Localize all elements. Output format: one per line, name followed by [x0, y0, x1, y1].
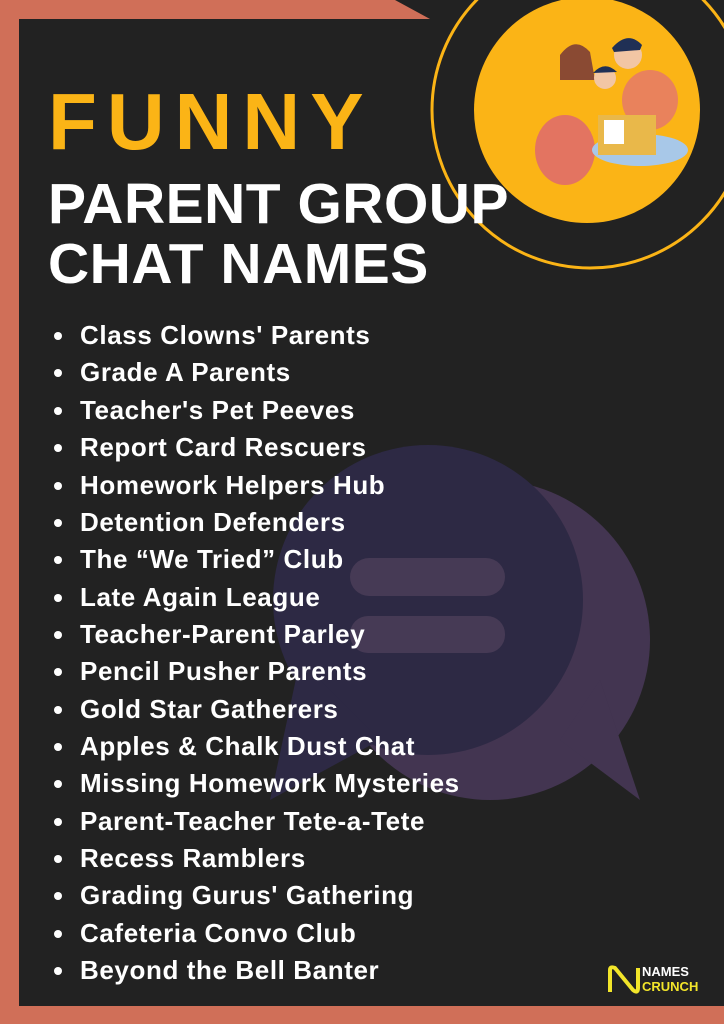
name list: Teacher-Parent Parley	[80, 619, 365, 649]
name list: Grade A Parents	[80, 357, 291, 387]
name list: Cafeteria Convo Club	[80, 918, 356, 948]
name list: Beyond the Bell Banter	[80, 955, 379, 985]
name list: Parent-Teacher Tete-a-Tete	[80, 806, 425, 836]
title	[48, 77, 509, 296]
name list: The “We Tried” Club	[80, 544, 344, 574]
title lines: parent group chat names: PARENT GROUP	[48, 172, 509, 236]
name list: Class Clowns' Parents	[80, 320, 370, 350]
name list: Apples & Chalk Dust Chat	[80, 731, 415, 761]
name list: Detention Defenders	[80, 507, 346, 537]
illustration: family reading in yellow circle with ring	[430, 0, 724, 270]
name list: Late Again League	[80, 582, 320, 612]
title lines: parent group chat names: CHAT NAMES	[48, 232, 429, 296]
name list: Teacher's Pet Peeves	[80, 395, 355, 425]
name list: Gold Star Gatherers	[80, 694, 338, 724]
logo: names crunch: CRUNCH	[642, 979, 698, 994]
name list: Recess Ramblers	[80, 843, 306, 873]
name list: Report Card Rescuers	[80, 432, 367, 462]
title lines: parent group chat names	[48, 172, 509, 296]
logo: names crunch: NAMES	[642, 964, 689, 979]
title line: funny: FUNNY	[48, 77, 374, 166]
name list: Pencil Pusher Parents	[80, 656, 367, 686]
name list: Missing Homework Mysteries	[80, 768, 460, 798]
name list: Homework Helpers Hub	[80, 470, 385, 500]
name list: Grading Gurus' Gathering	[80, 880, 414, 910]
logo: names crunch	[608, 964, 698, 994]
